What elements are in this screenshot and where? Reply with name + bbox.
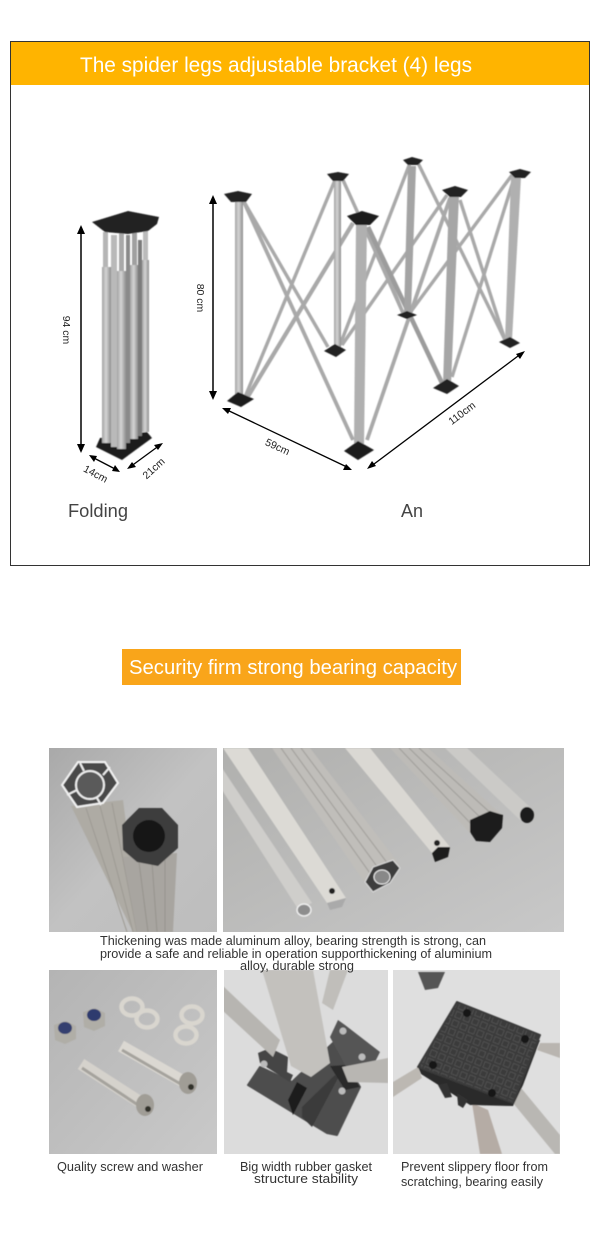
label: 21 cm: 21cm xyxy=(140,456,168,482)
arrow: 110 cm xyxy=(367,351,525,469)
label: 14 cm: 14cm xyxy=(81,463,110,486)
central tube xyxy=(262,970,330,1077)
round tube xyxy=(222,768,312,909)
caption: screw and washer: Quality screw and washer xyxy=(57,1160,203,1174)
ribbed octagon tube xyxy=(273,748,350,822)
capped octagon end xyxy=(122,808,178,866)
photo: rubber gasket base xyxy=(222,970,388,1154)
caption: rubber gasket: Big width rubber gasket xyxy=(240,1160,373,1174)
arrow: 21 cm xyxy=(127,443,163,469)
label: 80 cm: 80 cm xyxy=(194,284,206,313)
caption: anti-slip: Prevent slippery floor from xyxy=(401,1160,548,1174)
distant foot xyxy=(418,972,445,990)
base plate xyxy=(248,1043,360,1135)
bolts xyxy=(340,1028,346,1034)
photo: profile tube cross-sections xyxy=(49,748,217,932)
legs xyxy=(472,1103,502,1154)
heading: security firm xyxy=(122,649,461,685)
text block: aluminium alloy description: alloy, durable strong xyxy=(240,958,354,973)
open octagon end xyxy=(62,762,118,807)
arrow: 59 cm xyxy=(222,408,352,470)
label: 59 cm: 59cm xyxy=(263,436,292,458)
open stand illustration xyxy=(224,157,531,460)
photo: anti-slip foot underside xyxy=(393,970,560,1154)
nuts xyxy=(54,1021,76,1044)
label: 94 cm: 94 cm xyxy=(60,316,72,345)
caption: anti-slip xyxy=(401,1160,548,1189)
folded stand illustration xyxy=(92,211,159,460)
label: 110 cm: 110cm xyxy=(446,399,478,428)
holes xyxy=(463,1009,471,1017)
header bar xyxy=(11,42,589,85)
text block: aluminium alloy description: provide a safe and reliable in operation supporthickening of aluminium xyxy=(100,946,492,961)
caption: rubber gasket xyxy=(240,1160,373,1186)
label: Folding: Folding xyxy=(68,501,128,521)
tube one xyxy=(71,800,140,932)
arrow: 94 cm height xyxy=(77,225,85,453)
photo: screws and washers xyxy=(49,970,217,1154)
washers xyxy=(122,998,202,1044)
uprights xyxy=(235,200,243,395)
bolts xyxy=(121,1046,186,1083)
feet xyxy=(227,392,254,407)
square tube with dark cap xyxy=(345,748,450,853)
text block: aluminium alloy description xyxy=(100,933,492,973)
tube two xyxy=(130,852,178,932)
caption: rubber gasket: structure stability xyxy=(254,1172,359,1186)
arrow: 80 cm height xyxy=(209,195,217,400)
top plates xyxy=(224,191,252,202)
label: An: An xyxy=(401,501,423,521)
photo: aluminium tube profiles xyxy=(222,748,564,932)
caption: anti-slip: scratching, bearing easily xyxy=(401,1175,544,1189)
text block: aluminium alloy description: Thickening was made aluminum alloy, bearing strength is strong, can xyxy=(100,933,486,948)
ribbed tube with octagon cap xyxy=(469,810,502,834)
panel: dimensions xyxy=(10,42,590,566)
tread plate xyxy=(418,1002,540,1103)
lugs and lower edge xyxy=(418,1040,540,1106)
heading: security firm: Security firm strong bearing capacity xyxy=(129,657,457,679)
struts xyxy=(222,985,280,1057)
round tube with cap xyxy=(445,748,533,820)
square tube with hole xyxy=(223,748,346,903)
arrow: 14 cm xyxy=(89,455,120,472)
heading: spider legs bracket: The spider legs adjustable bracket (4) legs xyxy=(80,54,472,77)
crossing braces xyxy=(243,163,515,440)
